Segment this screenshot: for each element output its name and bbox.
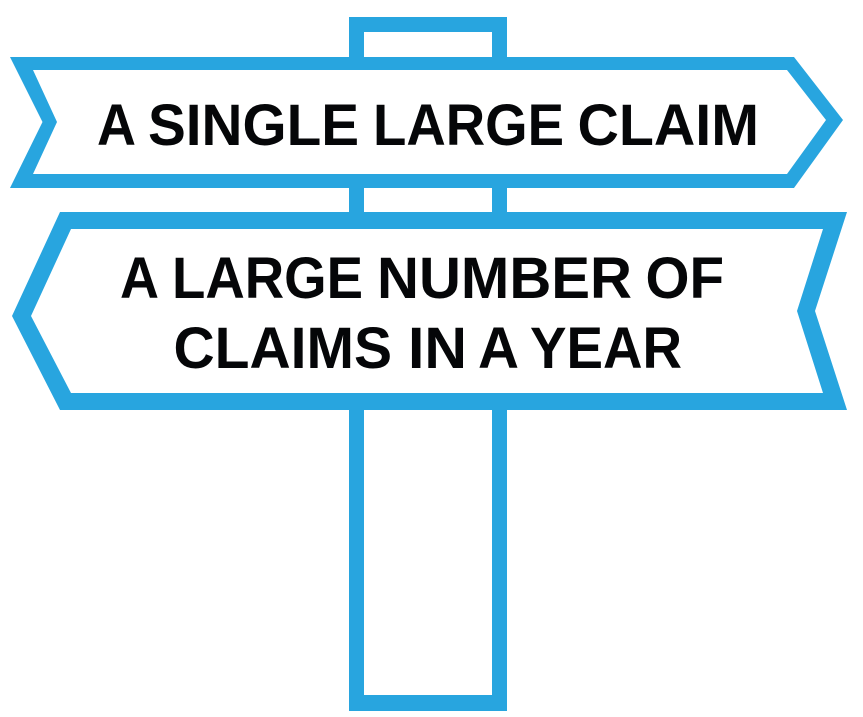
sign text: a large number of claims in a year: YEAR	[530, 316, 682, 381]
sign text: a single large claim: CLAIM	[578, 93, 759, 158]
sign: right-pointing arrow	[10, 57, 843, 188]
sign text: a single large claim	[97, 93, 759, 158]
post	[349, 17, 507, 711]
sign text: a large number of claims in a year: OF	[646, 246, 724, 311]
sign text: a large number of claims in a year	[120, 246, 724, 381]
sign: left-pointing arrow	[12, 212, 847, 410]
sign text: a single large claim: A	[97, 93, 136, 158]
sign text: a large number of claims in a year: IN	[408, 316, 467, 381]
sign text: a large number of claims in a year: A	[478, 316, 519, 381]
sign text: a large number of claims in a year: A	[120, 246, 159, 311]
sign text: a large number of claims in a year: LARGE	[172, 246, 363, 311]
sign text: a large number of claims in a year: CLAIMS	[174, 316, 392, 381]
sign text: a large number of claims in a year: NUMBER	[377, 246, 632, 311]
sign text: a single large claim: SINGLE	[148, 93, 359, 158]
sign text: a single large claim: LARGE	[373, 93, 564, 158]
